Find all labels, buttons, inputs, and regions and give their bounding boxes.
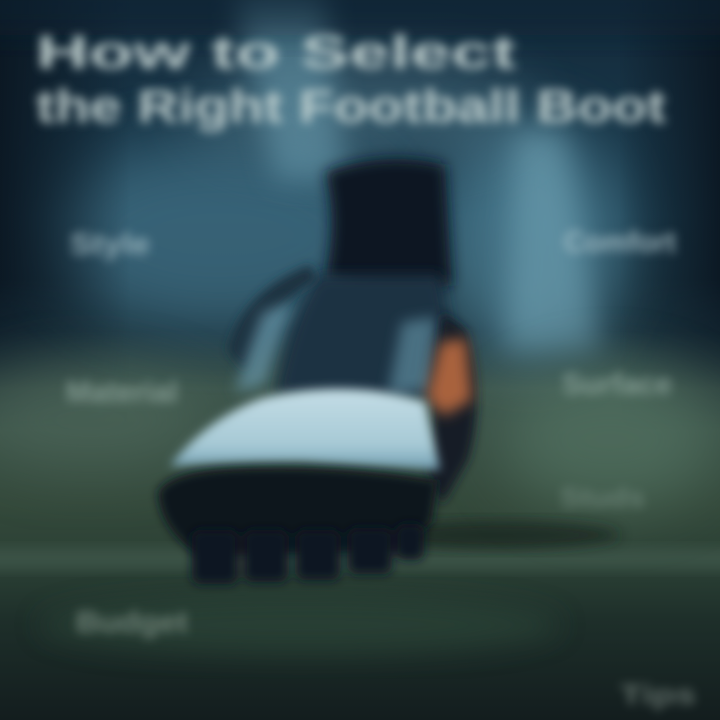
- boot studs: [192, 524, 424, 584]
- label: middle left: Material: [66, 376, 178, 409]
- label: bottom left: Budget: [76, 606, 188, 639]
- white toe cap: [170, 389, 440, 470]
- boot heel: [428, 312, 477, 505]
- label: lower right: Studs: [560, 482, 645, 513]
- label: bottom right: Tips: [620, 679, 696, 710]
- label: top right: Comfort: [564, 226, 676, 259]
- title: [36, 26, 666, 132]
- label: top left: Style: [70, 228, 150, 261]
- title: How to Select: [36, 26, 516, 78]
- orange heel patch: [426, 338, 472, 416]
- boot collar: [325, 159, 452, 291]
- boot sole: [158, 467, 438, 556]
- boot side strap: [228, 265, 318, 372]
- label: middle right: Surface: [562, 368, 672, 401]
- icon: football boot: [158, 159, 477, 584]
- boot upper mesh: [275, 275, 462, 400]
- title: the Right Football Boot: [36, 80, 666, 132]
- ground shadow: [380, 521, 620, 549]
